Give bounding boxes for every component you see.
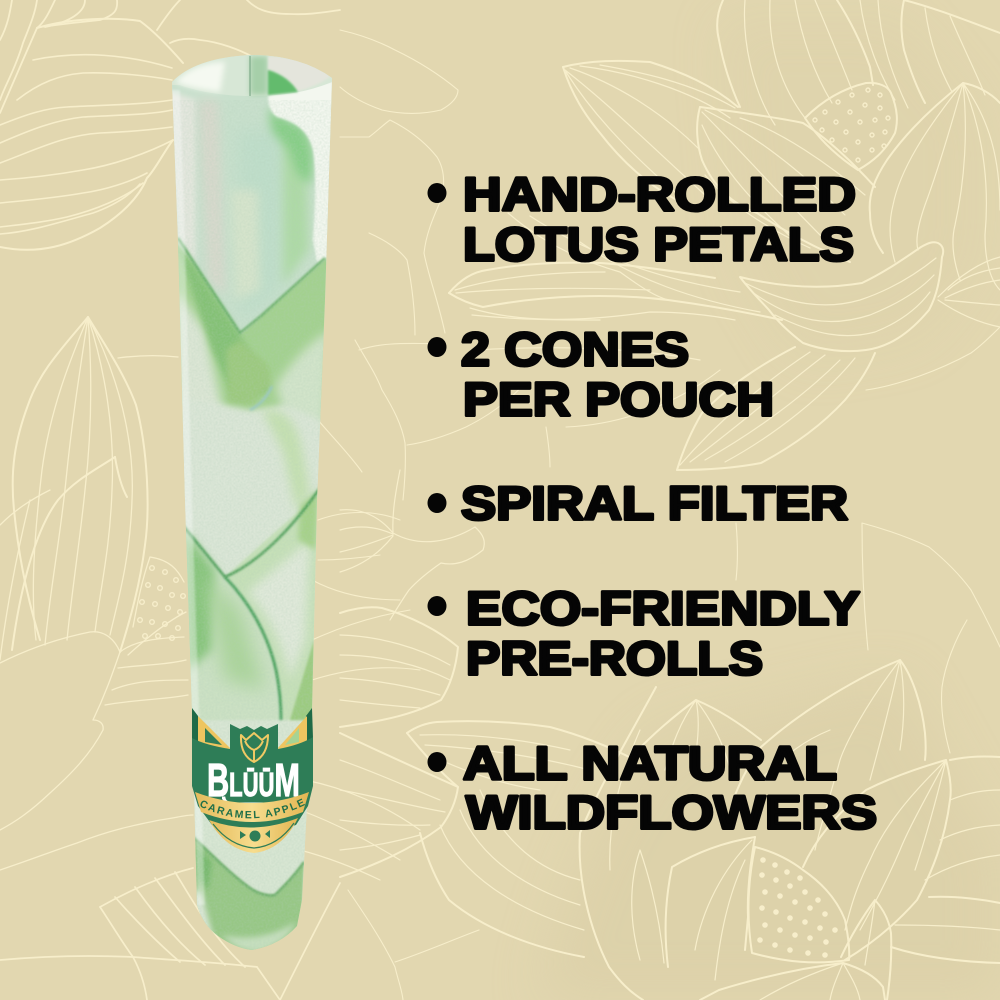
wordmark: BLŪŪM: [207, 754, 300, 806]
bullet: 2 cones per pouch: PER POUCH: [463, 372, 774, 426]
bullet: hand-rolled lotus petals: [428, 168, 856, 270]
green band and white strip at right: [268, 80, 340, 262]
gold ribbon: [195, 792, 309, 822]
product label: Bloom Caramel Apple: CARAMEL APPLE: [200, 798, 305, 818]
gold badge: [209, 818, 298, 853]
bullet: spiral filter: SPIRAL FILTER: [461, 476, 848, 530]
bullet: all natural wildflowers: WILDFLOWERS: [466, 786, 877, 838]
bullet: eco-friendly pre-rolls: ECO-FRIENDLY: [466, 582, 860, 634]
badge icons: [240, 830, 270, 842]
flavor name: [199, 803, 309, 818]
product label: Bloom Caramel Apple: [192, 708, 313, 853]
green band: [192, 724, 313, 832]
green middle wrap: [178, 236, 326, 420]
bullet: 2 cones per pouch: [428, 322, 774, 426]
bullet: eco-friendly pre-rolls: [428, 582, 860, 684]
pre-roll cone: [172, 55, 332, 950]
cone opening: [172, 55, 332, 96]
lower green spiral: [180, 485, 322, 720]
bullet: all natural wildflowers: [428, 736, 877, 838]
bottom green wrap: [194, 808, 307, 950]
tulip logo: [241, 733, 268, 762]
upper pale petal wrap: [172, 85, 317, 330]
bullet: all natural wildflowers: ALL NATURAL: [463, 736, 837, 790]
bullet: hand-rolled lotus petals: LOTUS PETALS: [463, 218, 854, 270]
gold chevrons: [198, 716, 307, 749]
bullet: 2 cones per pouch: 2 CONES: [461, 322, 689, 376]
bullet: eco-friendly pre-rolls: PRE-ROLLS: [466, 632, 763, 684]
bullet: hand-rolled lotus petals: HAND-ROLLED: [463, 168, 856, 220]
lower pale petal wrap: [182, 385, 320, 524]
